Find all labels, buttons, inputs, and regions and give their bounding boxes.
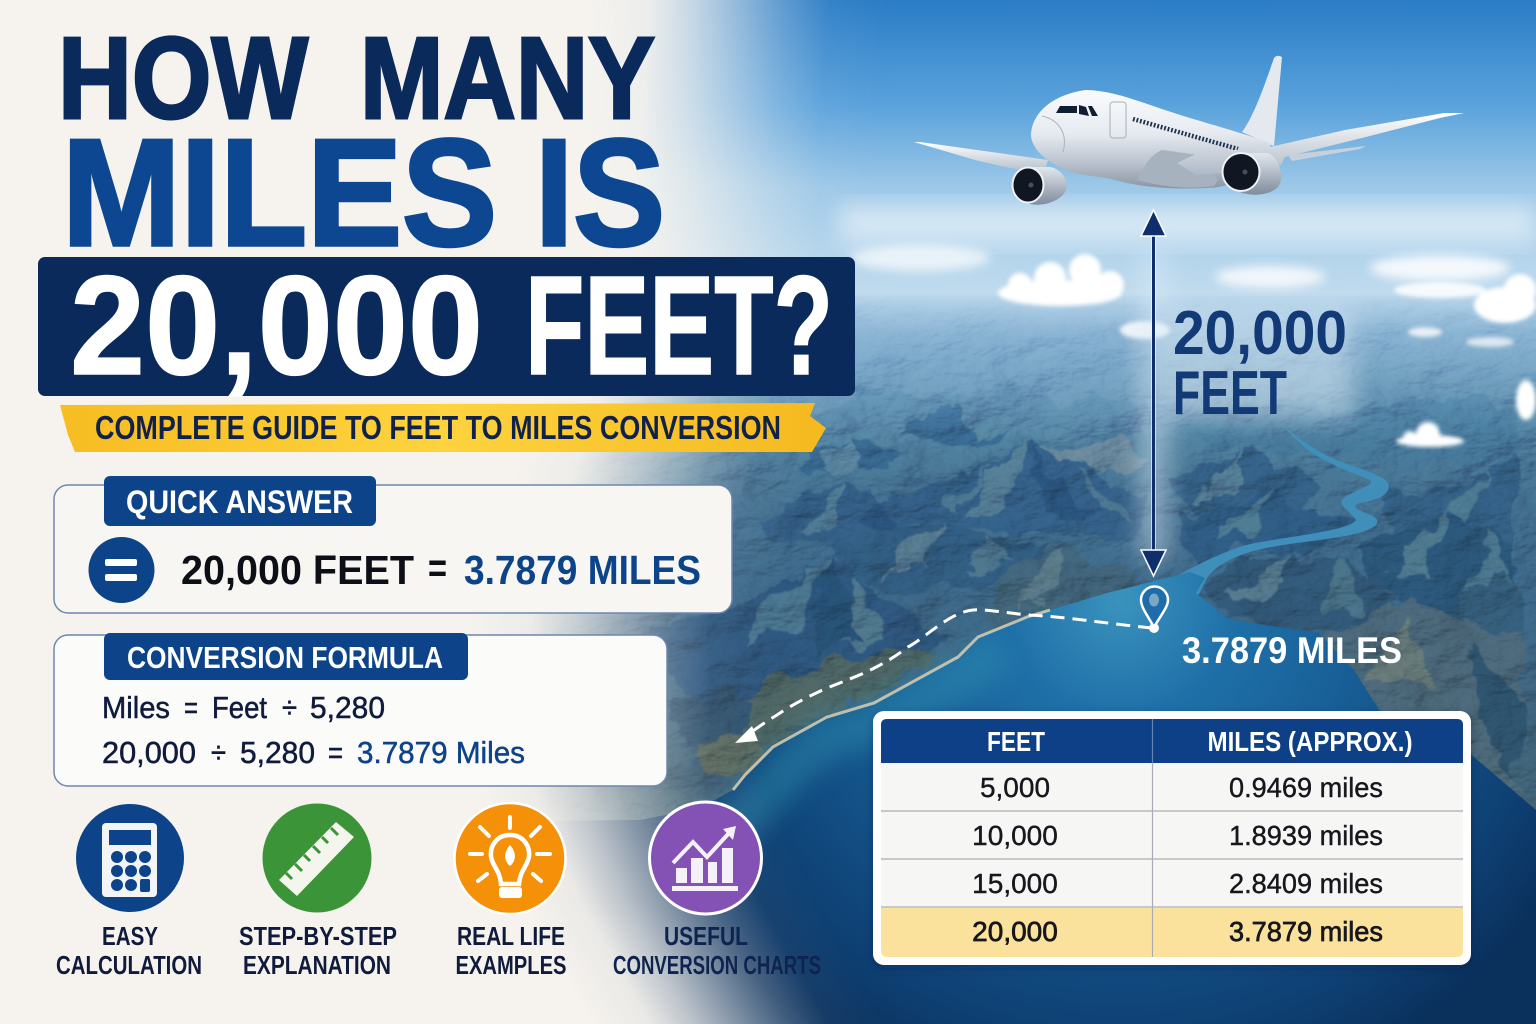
- title line: how many: [58, 13, 655, 143]
- quick answer tab: [104, 476, 376, 526]
- label line 2: EXPLANATION: [243, 950, 391, 980]
- background: terrain texture: [400, 296, 1536, 826]
- conversion formula tab: CONVERSION FORMULA: [127, 640, 443, 675]
- conversion table: 3.7879 miles: [1229, 916, 1383, 947]
- label: EASY: [102, 921, 158, 951]
- formula line 2: [102, 735, 525, 770]
- conversion table: MILES (APPROX.): [1208, 726, 1412, 757]
- cabin windows: [1133, 119, 1238, 149]
- background: mountains: [650, 335, 1520, 805]
- icon: light bulb: [454, 803, 566, 914]
- formula line 1: ÷: [282, 690, 297, 725]
- title box: 20,000 feet: [38, 246, 855, 404]
- conversion table: 0.9469 miles: [1229, 772, 1383, 803]
- table header: [881, 719, 1463, 763]
- right engine: [1222, 153, 1281, 195]
- formula line 2: 20,000: [102, 735, 196, 770]
- icon: ruler: [262, 804, 372, 912]
- background: river: [1150, 423, 1389, 600]
- wing flap: [1288, 146, 1366, 161]
- formula line 1: [102, 690, 385, 725]
- feature: step by step: [239, 804, 397, 980]
- quick answer tab: QUICK ANSWER: [126, 484, 353, 520]
- background: coastline: [733, 610, 1050, 790]
- panel: conversion formula: [54, 633, 667, 786]
- background: sky: [0, 0, 1536, 300]
- background: coastal shallows: [700, 650, 1000, 850]
- altitude arrow: [1141, 210, 1166, 576]
- background: clouds: [840, 205, 1536, 447]
- background: land base: [400, 296, 1536, 826]
- dashed route: [735, 610, 1152, 743]
- windshield: [1056, 105, 1098, 116]
- formula line 1: Miles: [102, 690, 170, 725]
- conversion table: 5,000: [980, 772, 1050, 803]
- label: STEP-BY-STEP: [239, 921, 397, 951]
- formula line 2: ÷: [211, 735, 226, 770]
- wing fairing: [1137, 150, 1218, 188]
- formula line 2: =: [328, 735, 343, 770]
- feature: easy calculation: [56, 804, 202, 980]
- conversion formula tab: [104, 633, 468, 680]
- title line: how many: HOW: [58, 13, 308, 143]
- conversion table: 20,000: [972, 916, 1058, 947]
- conversion table: 2.8409 miles: [1229, 868, 1383, 899]
- formula line 1: 5,280: [310, 690, 385, 725]
- nose panel line: [1042, 116, 1064, 152]
- tail fin: [1242, 56, 1282, 146]
- formula line 2: 5,280: [240, 735, 315, 770]
- background: ocean: [400, 572, 1536, 1024]
- feature: real life examples: [454, 803, 566, 980]
- quick answer value: =: [428, 545, 447, 591]
- quick answer value: 3.7879 MILES: [464, 547, 701, 593]
- title line: how many: MANY: [360, 13, 655, 143]
- icon: equals sign: [88, 537, 154, 603]
- conversion table: 1.8939 miles: [1229, 820, 1383, 851]
- fuselage: [1031, 90, 1272, 189]
- icon: calculator: [76, 804, 184, 912]
- subtitle banner: COMPLETE GUIDE TO FEET TO MILES CONVERSION: [95, 409, 781, 446]
- altitude label: [1173, 299, 1347, 428]
- subtitle banner: [60, 403, 826, 452]
- distance label: 3.7879 MILES: [1182, 630, 1402, 671]
- label line 2: CALCULATION: [56, 950, 202, 980]
- left engine: [1012, 167, 1066, 205]
- icon: growth chart: [650, 802, 762, 914]
- conversion table: 10,000: [972, 820, 1058, 851]
- title box: 20,000 feet: 20,000: [70, 246, 483, 404]
- label: USEFUL: [664, 921, 748, 951]
- label line 2: CONVERSION CHARTS: [613, 950, 821, 980]
- altitude label: 20,000: [1173, 299, 1347, 368]
- background: horizon haze: [400, 290, 1536, 440]
- label: REAL LIFE: [457, 921, 565, 951]
- quick answer value: [181, 545, 701, 593]
- formula line 1: =: [184, 690, 198, 725]
- map pin: [1141, 586, 1168, 633]
- background: terrain tone: [400, 296, 1536, 826]
- near wing: [1177, 113, 1464, 175]
- conversion table: 15,000: [972, 868, 1058, 899]
- title line: miles is: MILES: [62, 108, 497, 278]
- quick answer value: 20,000 FEET: [181, 547, 414, 593]
- formula line 1: Feet: [212, 690, 267, 725]
- cabin door: [1110, 102, 1126, 138]
- far wing: [914, 142, 1048, 174]
- conversion table: FEET: [987, 726, 1045, 757]
- panel: quick answer: [54, 476, 732, 613]
- altitude label: FEET: [1173, 359, 1287, 428]
- airplane: [914, 56, 1464, 205]
- altitude glow: [1140, 250, 1353, 560]
- title line: miles is: IS: [535, 108, 665, 278]
- label line 2: EXAMPLES: [456, 950, 566, 980]
- formula line 2: 3.7879 Miles: [357, 735, 525, 770]
- conversion table: [873, 711, 1471, 965]
- feature: useful charts: [613, 802, 821, 980]
- highlighted row: [881, 908, 1463, 957]
- title box: 20,000 feet: FEET?: [525, 246, 833, 404]
